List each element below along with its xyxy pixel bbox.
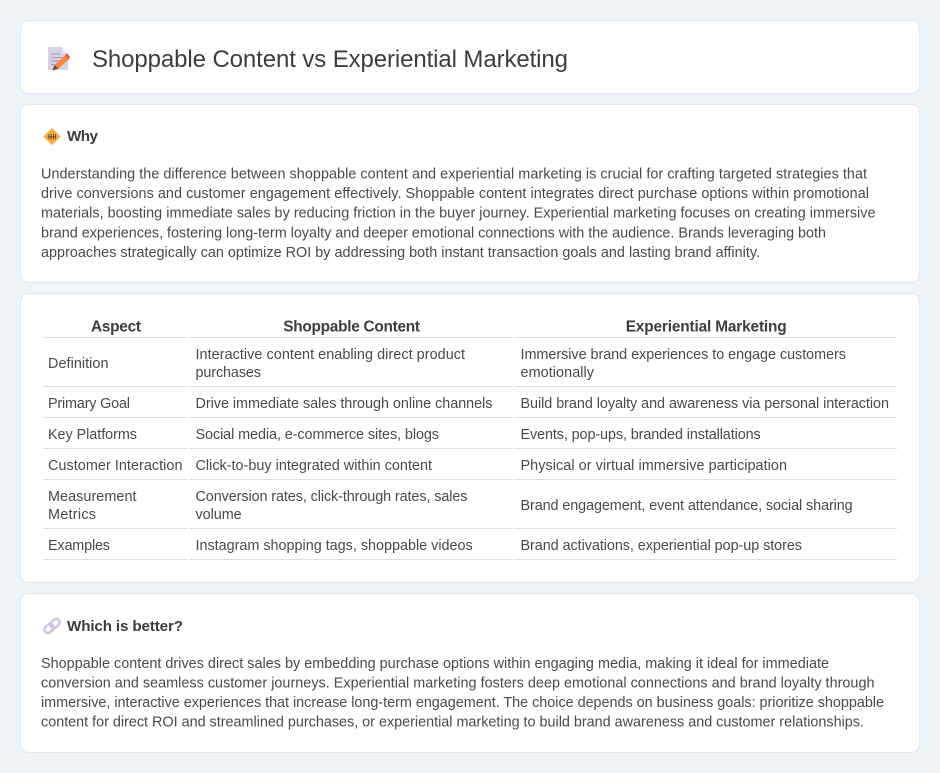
- row: customer interaction: Click-to-buy integrated within content: [196, 458, 432, 474]
- row: examples: [48, 538, 802, 554]
- panel: why: [20, 104, 920, 282]
- table header row: Shoppable Content: [283, 318, 420, 336]
- row: customer interaction: Physical or virtual immersive participation: [520, 458, 787, 474]
- text block: recommendation: conversion and seamless customer journeys. Experiential marketing fosters deep emotional connections and brand loyalty through: [41, 676, 874, 692]
- row: definition: Definition: [48, 356, 108, 372]
- table header row: Aspect: [91, 318, 141, 336]
- table header row: Experiential Marketing: [626, 318, 787, 336]
- text block: why explanation: materials, boosting immediate sales by reducing friction in the buyer journey. Experiential marketing focuses on creating immersive: [41, 206, 876, 222]
- row: examples: Instagram shopping tags, shoppable videos: [196, 538, 473, 554]
- text block: recommendation: immersive, interactive experiences that increase long-term engagement. The choice depends on business goals: prioritize shoppable: [41, 695, 884, 711]
- row: key platforms: Social media, e-commerce sites, blogs: [196, 427, 439, 443]
- row: measurement metrics: [48, 489, 853, 523]
- row: measurement metrics: Conversion rates, click-through rates, sales: [196, 489, 468, 505]
- text block: why explanation: approaches strategically can optimize ROI by addressing both instant transaction goals and lasting brand affinity.: [41, 245, 760, 261]
- text block: recommendation: Shoppable content drives direct sales by embedding purchase options within engaging media, making it ideal for immediate: [41, 656, 829, 672]
- row: primary goal: Primary Goal: [48, 396, 130, 412]
- icon: memo with pencil: [48, 47, 70, 70]
- row: definition: [48, 347, 846, 381]
- icon: diamond sign: [44, 128, 60, 144]
- text block: why explanation: Understanding the difference between shoppable content and experiential marketing is crucial for crafting targeted strategies that: [41, 166, 867, 182]
- row: key platforms: Key Platforms: [48, 427, 137, 443]
- icon: chain link: [43, 617, 61, 635]
- row: key platforms: [48, 427, 761, 443]
- row: examples: Brand activations, experiential pop-up stores: [520, 538, 802, 554]
- row: definition: purchases: [196, 365, 261, 381]
- row: customer interaction: Customer Interaction: [48, 458, 182, 474]
- row: measurement metrics: Measurement: [48, 489, 136, 505]
- row: primary goal: Build brand loyalty and awareness via personal interaction: [520, 396, 889, 412]
- row: definition: Interactive content enabling direct product: [196, 347, 465, 363]
- row: customer interaction: [48, 458, 787, 474]
- row: examples: Examples: [48, 538, 110, 554]
- panel: which is better: [20, 594, 920, 752]
- text block: recommendation: [41, 656, 884, 730]
- text block: why explanation: [41, 166, 876, 261]
- row: primary goal: Drive immediate sales through online channels: [196, 396, 492, 412]
- title: Shoppable Content vs Experiential Marketing: [92, 46, 568, 73]
- row: measurement metrics: volume: [196, 507, 242, 523]
- panel: title header: [20, 20, 920, 94]
- row: definition: Immersive brand experiences to engage customers: [520, 347, 846, 363]
- row: key platforms: Events, pop-ups, branded installations: [520, 427, 761, 443]
- heading: why: Why: [67, 128, 99, 145]
- row: definition: emotionally: [520, 365, 595, 381]
- row: measurement metrics: Metrics: [48, 507, 96, 523]
- row: primary goal: [48, 396, 889, 412]
- text block: why explanation: drive conversions and customer engagement effectively. Shoppable content integrates direct purchase options within promotional: [41, 186, 869, 202]
- table header row: [91, 318, 787, 336]
- text block: why explanation: brand experiences, fostering long-term loyalty and deeper emotional connections with the audience. Brands leveraging both: [41, 225, 826, 241]
- row: measurement metrics: Brand engagement, event attendance, social sharing: [520, 498, 853, 514]
- text block: recommendation: content for direct ROI and streamlined purchases, or experiential marketing to build brand awareness and customer relationships.: [41, 714, 864, 730]
- panel: comparison table: [20, 294, 920, 582]
- heading: which is better: Which is better?: [67, 618, 183, 635]
